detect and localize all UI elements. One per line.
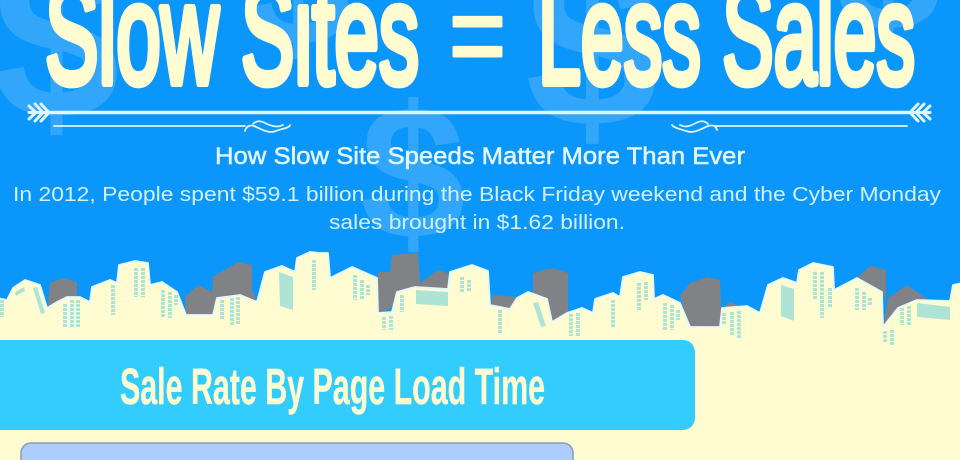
intro text: In 2012, People spent $59.1 billion during the Black Friday weekend and the Cyber Monday	[13, 183, 942, 206]
intro text: sales brought in $1.62 billion.	[329, 211, 625, 234]
building windows	[2, 260, 909, 345]
ornamental divider	[29, 104, 930, 132]
sky background	[0, 0, 960, 340]
grey background buildings	[48, 253, 930, 328]
section heading: Sale Rate By Page Load Time	[120, 358, 545, 415]
intro text	[13, 183, 942, 234]
chart panel	[21, 443, 573, 460]
section heading panel	[0, 340, 695, 430]
subtitle: How Slow Site Speeds Matter More Than Ever	[215, 143, 745, 170]
background dollar signs	[0, 0, 941, 279]
background dollar signs: $	[360, 67, 466, 279]
large building windows	[15, 272, 950, 327]
cream city skyline	[0, 252, 960, 460]
